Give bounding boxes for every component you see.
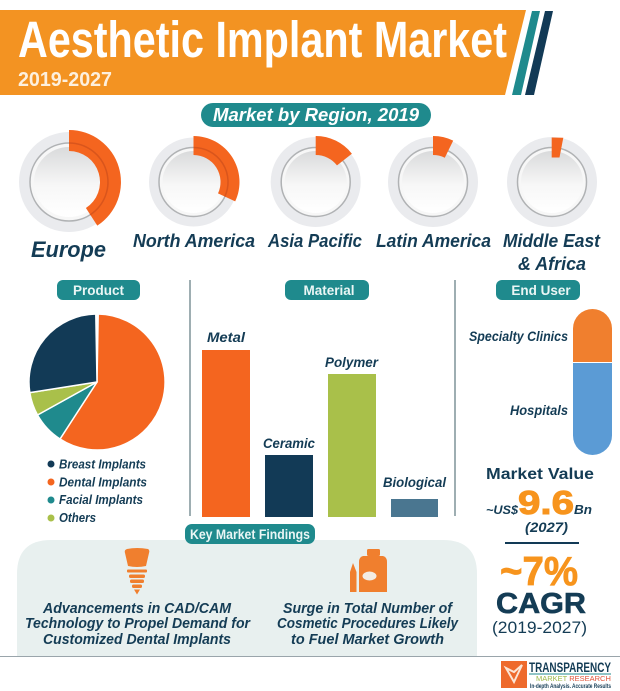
label: hospitals: Hospitals	[510, 403, 568, 418]
bar: polymer	[325, 355, 379, 517]
finding text: CAD/CAM: Customized Dental Implants	[43, 632, 231, 648]
finding text: cosmetic procedures: to Fuel Market Growth	[291, 632, 444, 648]
icon: dental implant	[125, 548, 149, 594]
stat: market value: Bn	[574, 503, 592, 517]
bar: ceramic	[263, 436, 315, 517]
subtitle: years: 2019-2027	[18, 69, 112, 91]
slice: facial implants	[38, 382, 97, 439]
heading pill: market by region: Market by Region, 2019	[213, 105, 419, 125]
bar: biological: Biological	[383, 475, 446, 490]
pie legend: Facial Implants	[59, 493, 143, 507]
icon: cosmetic bottle and tube	[350, 549, 387, 592]
pie chart: product	[29, 314, 165, 450]
heading pill: material	[285, 280, 369, 300]
bar: ceramic: Ceramic	[263, 436, 315, 451]
stat: market value: (2027)	[525, 520, 569, 535]
heading pill: material: Material	[303, 283, 355, 298]
heading pill: product: Product	[73, 283, 124, 298]
pie legend: Breast Implants	[59, 458, 146, 472]
finding text: cosmetic procedures: Surge in Total Number of	[283, 601, 454, 617]
bar chart: material	[202, 330, 446, 517]
stat: market value: ~US$	[486, 503, 518, 517]
stat: market value: Market Value	[486, 466, 594, 483]
logo: Transparency Market Research	[501, 660, 612, 690]
finding text: CAD/CAM: Technology to Propel Demand for	[25, 616, 251, 632]
pie legend: Others	[59, 511, 96, 525]
stat: CAGR: (2019-2027)	[492, 618, 587, 637]
label: Europe: Europe	[31, 237, 106, 262]
pie legend: Dental Implants	[59, 476, 147, 490]
slice: dental implants	[60, 314, 165, 450]
finding text: cosmetic procedures: Cosmetic Procedures Likely	[277, 616, 459, 632]
panel: key market findings	[17, 524, 477, 656]
label: Asia Pacific: Asia Pacific	[267, 230, 363, 251]
stat: CAGR: CAGR	[496, 588, 586, 620]
donut: Asia Pacific	[267, 136, 363, 251]
stat: market value: 9.6	[518, 484, 574, 521]
donut: North America	[133, 136, 255, 251]
logo: Transparency Market Research: MARKET RESEARCH	[536, 674, 611, 683]
finding text: CAD/CAM: Advancements in CAD/CAM	[42, 601, 232, 617]
title banner	[0, 10, 553, 95]
donut: Middle East and Africa	[503, 137, 601, 274]
heading pill: key market findings	[185, 524, 315, 544]
heading pill: end user	[496, 280, 580, 300]
heading pill: product	[57, 280, 140, 300]
bar: biological	[383, 475, 446, 517]
stat: CAGR: ~7%	[500, 548, 578, 594]
label: North America: North America	[133, 230, 255, 251]
stat: market value	[486, 466, 594, 535]
label: Middle East and Africa: & Africa	[518, 253, 586, 274]
stat: CAGR	[492, 548, 587, 637]
label: specialty clinics: Specialty Clinics	[469, 329, 568, 344]
capsule chart: end user	[469, 309, 612, 455]
donut: Europe	[19, 130, 121, 262]
heading pill: key market findings: Key Market Findings	[190, 527, 310, 542]
title: Aesthetic Implant Market	[18, 11, 507, 68]
pie legend	[48, 458, 147, 525]
label: Middle East and Africa: Middle East	[503, 230, 601, 251]
label: Latin America: Latin America	[376, 230, 491, 251]
bar: metal	[202, 330, 250, 517]
bar: metal: Metal	[207, 330, 245, 345]
slice: others	[30, 382, 97, 415]
bar: polymer: Polymer	[325, 355, 379, 370]
slice: breast implants	[29, 314, 97, 393]
heading pill: end user: End User	[511, 283, 571, 298]
donut: Latin America	[376, 136, 491, 251]
